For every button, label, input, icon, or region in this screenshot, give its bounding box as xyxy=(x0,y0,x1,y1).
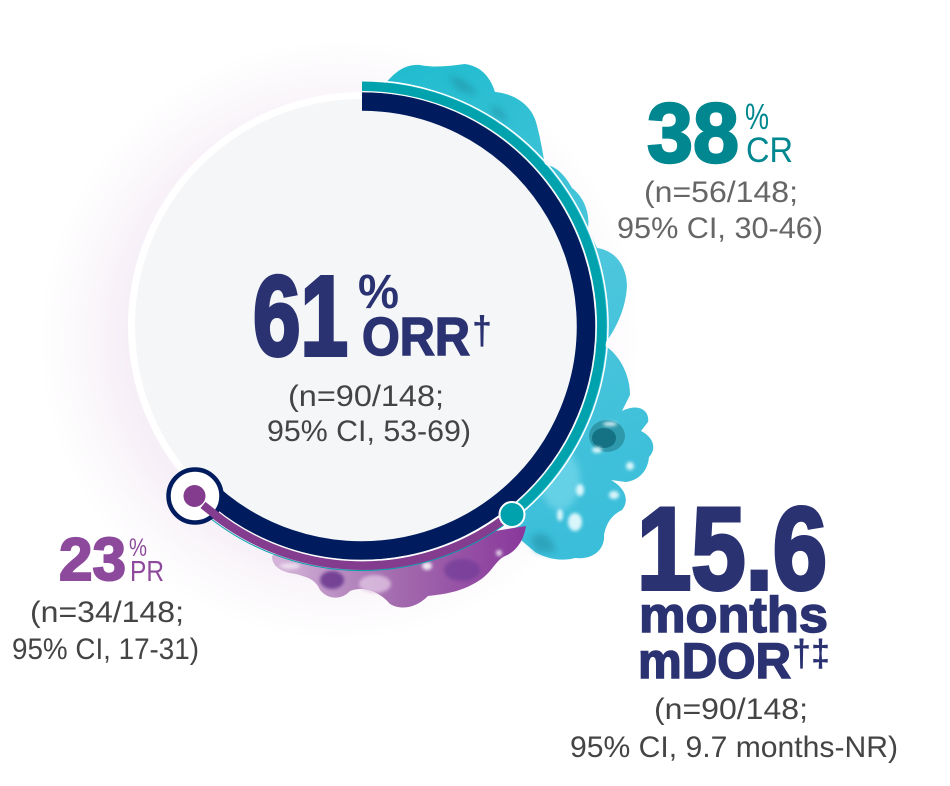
stat: 38% CR: % xyxy=(745,96,769,137)
stat: 15.6 months mDOR: months xyxy=(639,587,828,643)
CR details xyxy=(617,176,823,245)
thin teal edge under purple arc xyxy=(205,514,512,571)
mDOR details xyxy=(570,693,898,764)
background glow xyxy=(40,40,640,640)
stat: 61% ORR: ORR xyxy=(362,307,470,367)
mDOR details: 95% CI, 9.7 months-NR) xyxy=(570,731,898,764)
ORR details xyxy=(267,380,471,448)
purple PR arc xyxy=(203,505,512,566)
stat: 61% ORR: † xyxy=(472,309,492,353)
PR details: 95% CI, 17-31) xyxy=(12,633,199,666)
teal paint splash xyxy=(385,64,653,560)
stat: 15.6 months mDOR: 15.6 xyxy=(637,483,827,614)
stat: 38% CR: CR xyxy=(746,131,793,170)
navy ORR arc xyxy=(203,102,586,550)
CR details: (n=56/148; xyxy=(644,176,798,209)
PR details: (n=34/148; xyxy=(30,596,184,629)
stat: 23% PR: 23 xyxy=(59,526,126,593)
purple PR marker xyxy=(168,470,222,522)
stat: 61% ORR: % xyxy=(358,266,399,319)
stat: 61% ORR: 61 xyxy=(253,253,348,379)
stat: 23% PR: PR xyxy=(130,556,164,588)
stat: 38% CR xyxy=(647,86,793,180)
stat: 23% PR: % xyxy=(129,534,147,562)
stat: 38% CR: 38 xyxy=(647,86,739,180)
stat: 23% PR xyxy=(59,526,164,593)
stat: 15.6 months mDOR xyxy=(637,483,830,689)
white separator arc xyxy=(196,91,597,561)
purple paint splash xyxy=(272,526,526,608)
outer white edge of teal arc xyxy=(362,80,608,516)
mDOR details: (n=90/148; xyxy=(654,693,808,726)
PR details xyxy=(12,596,199,666)
stat: 15.6 months mDOR: mDOR xyxy=(638,633,791,689)
stat: 15.6 months mDOR: †‡ xyxy=(792,633,830,675)
ORR details: (n=90/148; xyxy=(288,380,444,413)
stat: 61% ORR xyxy=(253,253,492,379)
teal CR arc xyxy=(362,86,602,513)
teal junction marker xyxy=(500,502,524,527)
central disc xyxy=(132,96,592,556)
CR details: 95% CI, 30-46) xyxy=(617,212,823,245)
ORR details: 95% CI, 53-69) xyxy=(267,415,471,448)
